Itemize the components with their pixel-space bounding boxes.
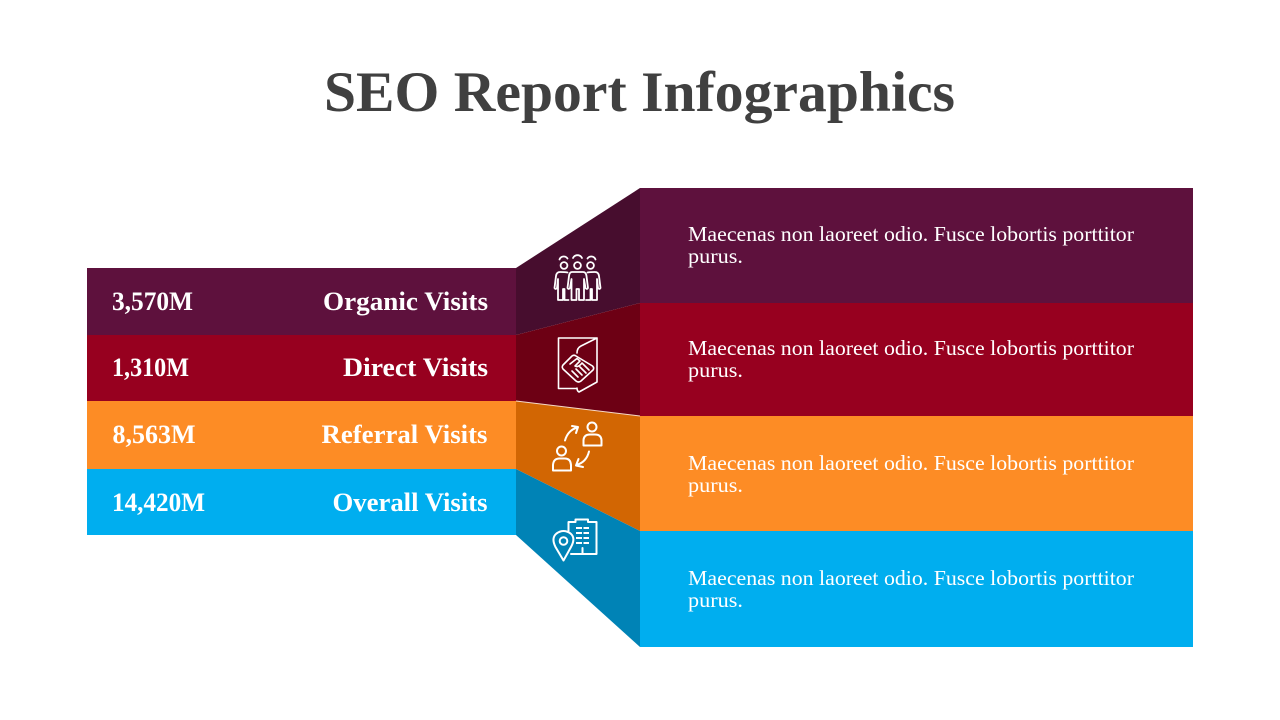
value: direct: 1,310M <box>112 353 189 382</box>
description: organic: Maecenas non laoreet odio. Fusce lobortis porttitor <box>688 222 1134 246</box>
icon: referral people with arrows <box>553 422 602 470</box>
right panel: referral <box>640 416 1193 531</box>
right panel: overall <box>640 531 1193 647</box>
description: overall: purus. <box>688 588 743 612</box>
connector: overall <box>516 469 640 647</box>
row: referral visits <box>87 401 1193 531</box>
row: organic visits <box>87 188 1193 335</box>
description: organic: purus. <box>688 244 743 268</box>
description: overall: Maecenas non laoreet odio. Fusce lobortis porttitor <box>688 566 1134 590</box>
description: referral: purus. <box>688 473 743 497</box>
left bar: organic <box>87 268 516 335</box>
description: direct: Maecenas non laoreet odio. Fusce lobortis porttitor <box>688 336 1134 360</box>
connector: referral <box>516 401 640 531</box>
description: direct: purus. <box>688 358 743 382</box>
label: direct: Direct Visits <box>343 353 488 382</box>
label: organic: Organic Visits <box>323 287 488 316</box>
row: overall visits <box>87 469 1193 647</box>
left bar: referral <box>87 401 516 469</box>
right panel: organic <box>640 188 1193 303</box>
connector: organic <box>516 188 640 335</box>
left bar: direct <box>87 335 516 401</box>
label: referral: Referral Visits <box>322 420 488 449</box>
left bar: overall <box>87 469 516 535</box>
icon: location pin and building <box>553 520 596 560</box>
icon: group of people <box>554 255 600 300</box>
description: referral: Maecenas non laoreet odio. Fusce lobortis porttitor <box>688 451 1134 475</box>
label: overall: Overall Visits <box>332 488 488 517</box>
connector: direct <box>516 303 640 416</box>
icon: handshake document <box>558 338 597 392</box>
value: referral: 8,563M <box>112 420 196 449</box>
right panel: direct <box>640 303 1193 416</box>
title: SEO Report Infographics <box>324 61 955 124</box>
value: organic: 3,570M <box>112 287 193 316</box>
row: direct visits <box>87 303 1193 416</box>
value: overall: 14,420M <box>112 488 205 517</box>
